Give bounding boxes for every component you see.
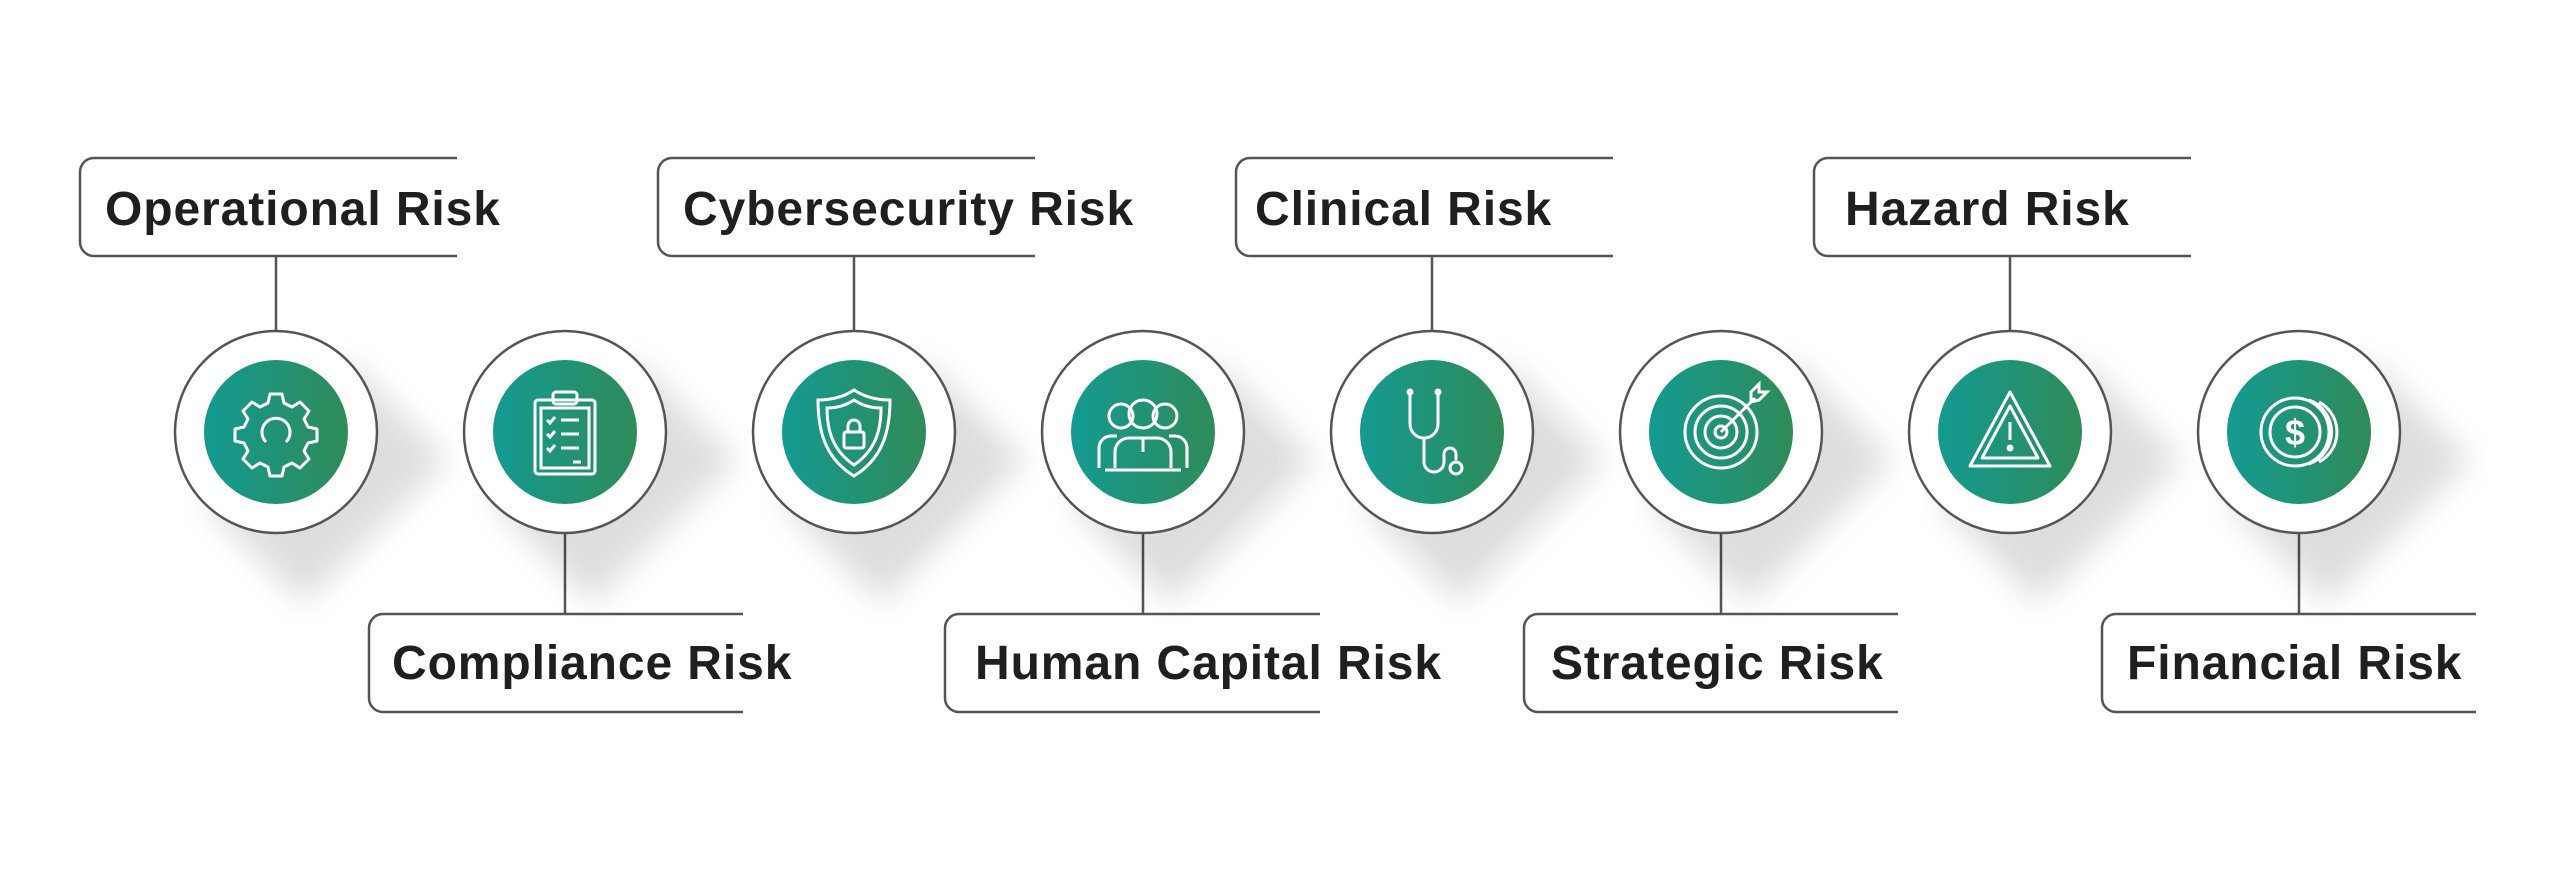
label: Compliance Risk <box>369 614 792 712</box>
icon circle: coin: $ <box>2285 412 2305 453</box>
label: Cybersecurity Risk: Cybersecurity Risk <box>683 183 1134 236</box>
label: Cybersecurity Risk <box>658 158 1134 256</box>
label: Strategic Risk <box>1524 614 1898 712</box>
item: Human Capital Risk <box>945 331 1442 712</box>
icon circle: target <box>1620 331 1822 533</box>
item: Financial Risk <box>2102 331 2476 712</box>
item: Compliance Risk <box>369 331 792 712</box>
icon circle: shield <box>753 331 955 533</box>
item: Cybersecurity Risk <box>658 158 1134 604</box>
label: Compliance Risk: Compliance Risk <box>392 637 792 690</box>
icon circle: clipboard <box>464 331 666 533</box>
label: Operational Risk: Operational Risk <box>105 183 501 236</box>
label: Operational Risk <box>80 158 501 256</box>
label: Strategic Risk: Strategic Risk <box>1551 637 1884 690</box>
icon circle: coin <box>2198 331 2400 533</box>
item: Clinical Risk <box>1236 158 1613 604</box>
label: Clinical Risk: Clinical Risk <box>1255 183 1552 236</box>
icon circle: gear <box>175 331 377 533</box>
label: Human Capital Risk: Human Capital Risk <box>975 637 1442 690</box>
item: Operational Risk <box>80 158 501 604</box>
item: Hazard Risk <box>1814 158 2191 604</box>
icon circle: stethoscope <box>1331 331 1533 533</box>
item: Strategic Risk <box>1524 331 1898 712</box>
icon circle: team <box>1042 331 1244 533</box>
label: Financial Risk <box>2102 614 2476 712</box>
label: Hazard Risk: Hazard Risk <box>1845 183 2130 236</box>
label: Hazard Risk <box>1814 158 2191 256</box>
label: Human Capital Risk <box>945 614 1442 712</box>
label: Clinical Risk <box>1236 158 1613 256</box>
icon circle: warning <box>1909 331 2111 533</box>
label: Financial Risk: Financial Risk <box>2127 637 2462 690</box>
